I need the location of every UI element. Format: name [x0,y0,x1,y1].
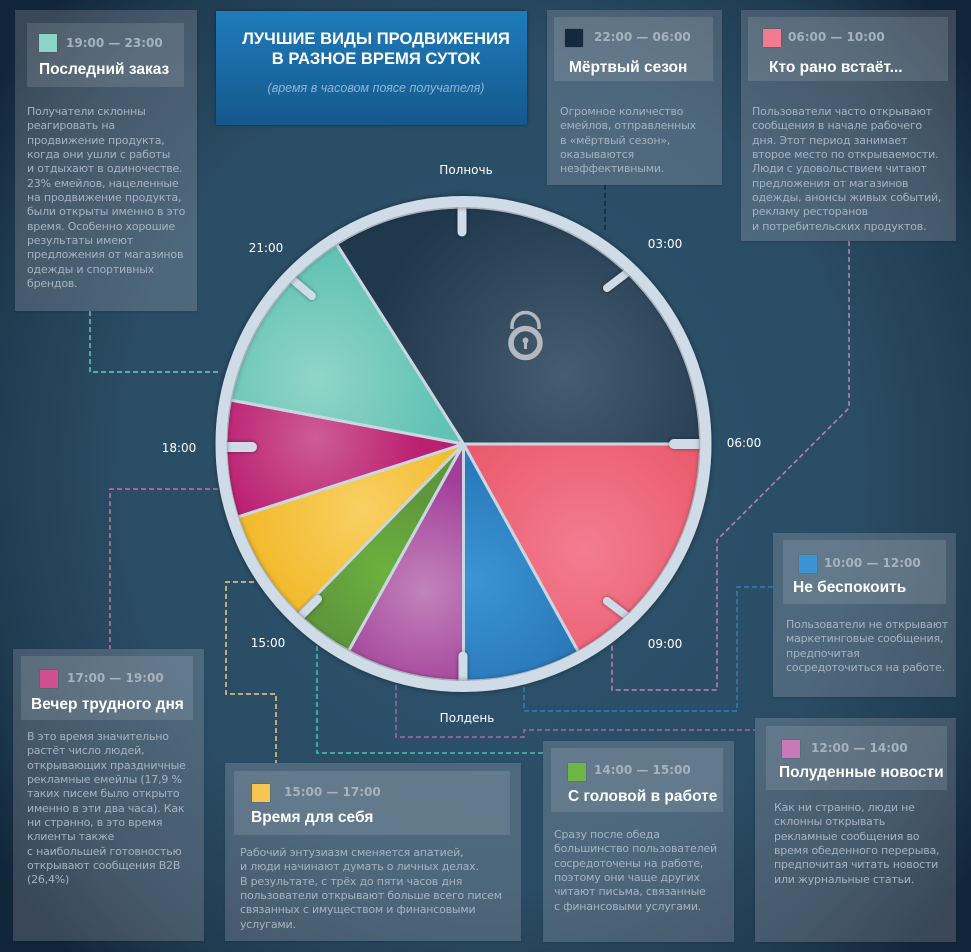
panel text: с наибольшей готовностью [27,845,182,858]
panel text [240,846,502,931]
time range: 14:00 — 15:00 [594,763,691,777]
panel text: одежды и спортивных [27,263,154,276]
panel header [783,540,946,604]
panel text: неэффективными. [560,162,664,175]
panel header [554,17,713,81]
panel text: услугами. [240,918,296,931]
clock label: 15:00: 15:00 [251,636,285,650]
heading [242,29,510,68]
panel title: Мёртвый сезон [569,59,687,76]
time range: 12:00 — 14:00 [811,741,908,755]
connector: after a hard day [110,489,218,649]
swatch [782,740,800,758]
panel: 22:00-06:00 dead season [547,10,722,185]
wedge: after a hard day 17-19 [226,400,464,517]
panel text: рекламу ресторанов [752,205,868,218]
panel text: были открыты именно в это [27,205,185,218]
panel text: предпочитая [786,647,860,660]
wedge: midday news 12-14 [348,444,464,681]
clock label: midnight: Полночь [439,163,493,177]
panel text: пользователи открывают больше всего писем [240,889,502,902]
panel: 15:00-17:00 time for yourself [225,763,521,941]
panel title: Последний заказ [39,61,169,78]
panel: 14:00-15:00 head in work [543,741,734,942]
swatch [565,29,583,47]
panel text: открывающих праздничные [27,759,186,772]
time range: 17:00 — 19:00 [67,671,164,685]
panel text: большинство пользователей [554,842,717,855]
swatch [799,555,817,573]
panel text: Огромное количество [560,105,683,118]
panel text: Сразу после обеда [554,828,660,841]
clock label: 09:00: 09:00 [648,637,682,651]
panel text: брендов. [27,277,77,290]
panel text: Пользователи часто открывают [752,105,932,118]
panel text: маркетинговые сообщения, [786,632,943,645]
connector: last order [90,311,219,372]
clock label: 06:00: 06:00 [727,436,761,450]
clock label: 21:00: 21:00 [249,241,283,255]
panel text [554,828,717,913]
panel text: таких писем было открыто [27,787,179,800]
time range: 19:00 — 23:00 [66,36,163,50]
clock label: 03:00: 03:00 [648,237,682,251]
panel text: открывают сообщения B2B [27,859,180,872]
panel: 10:00-12:00 do not disturb [773,533,956,697]
panel text [752,105,941,233]
panel text: склонны открывать [774,815,885,828]
panel header [551,748,723,812]
panel text: В это время значительно [27,730,169,743]
time range: 10:00 — 12:00 [824,556,921,570]
panel: 17:00-19:00 after a hard day [13,649,204,941]
wedge: head in work 14-15 [298,444,464,651]
connector: midday news [396,685,755,737]
panel text [774,801,939,886]
panel title: Кто рано встаёт... [769,59,903,76]
connector: head in work [317,645,543,753]
clock label: 18:00: 18:00 [162,441,196,455]
wedge: do not disturb 10-12 [464,444,578,681]
wedge: early risers 06-10 [464,444,701,652]
panel text: одежды, анонсы живых событий, [752,191,941,204]
panel title: Вечер трудного дня [31,696,184,713]
panel text: на продвижение продукта, [27,191,181,204]
panel text: Получатели склонны [27,105,146,118]
time range: 15:00 — 17:00 [284,785,381,799]
title panel [216,11,527,125]
panel text: Как ни странно, люди не [774,801,915,814]
time range: 06:00 — 10:00 [788,30,885,44]
wedge: time for yourself 15-17 [238,444,464,614]
heading: ЛУЧШИЕ ВИДЫ ПРОДВИЖЕНИЯ [242,29,510,48]
panel text: и отдыхают в одиночестве. [27,162,182,175]
panel text: связанных с имуществом и финансовыми [240,903,475,916]
panel text: предложения от магазинов [27,248,183,261]
connector: do not disturb [524,587,773,711]
panel text: (26,4%) [27,873,69,886]
panel title: С головой в работе [568,788,717,805]
panel text: продвижение продукта, [27,134,165,147]
panel text: сообщения в начале рабочего [752,119,922,132]
panel text: рекламные емейлы (17,9 % [27,773,182,786]
panel text: время. Особенно хорошие [27,220,175,233]
clock ring [221,202,706,686]
swatch [763,29,781,47]
subtitle: (время в часовом поясе получателя) [268,81,484,95]
panel text: Рабочий энтузиазм сменяется апатией, [240,846,463,859]
panel: 06:00-10:00 early risers [741,10,956,241]
swatch [40,670,58,688]
panel text: с финансовыми услугами. [554,900,701,913]
hour ticks [222,203,705,685]
panel text: сосредоточиться на работе. [786,661,945,674]
wedge: last order 19-22 [230,244,464,444]
panel text: второе место по открываемости. [752,148,938,161]
panel text [27,730,186,886]
panel text: рекламные сообщения во [774,830,919,843]
panel text: 23% емейлов, нацеленные [27,177,178,190]
panel header [27,23,184,87]
panel text: предпочитая читать новости [774,858,938,871]
panel text [786,618,948,674]
panel text: предложения от магазинов [752,177,908,190]
swatch [252,784,270,802]
time range: 22:00 — 06:00 [594,30,691,44]
icon: padlock [511,312,540,358]
panel text: результаты имеют [27,234,133,247]
panel text: и люди начинают думать о личных делах. [240,860,479,873]
panel text: читают письма, связанные [554,885,706,898]
wedge: dead season 22-06 [336,207,700,444]
panel text: клиенты также [27,830,114,843]
panel text: именно в эти два часа). Как [27,802,184,815]
pie wedges [226,207,701,681]
panel header [748,17,948,81]
panel text: ни странно, в это время [27,816,162,829]
swatch [39,34,57,52]
panel text: В результате, с трёх до пяти часов дня [240,875,462,888]
panel text: и потребительских продуктов. [752,220,926,233]
clock label: noon: Полдень [440,711,494,725]
heading: В РАЗНОЕ ВРЕМЯ СУТОК [272,49,480,68]
panel: 19:00-23:00 last order [15,10,197,311]
panel text: поэтому они чаще других [554,871,700,884]
panel text [560,105,696,175]
panel text: дня. Этот период занимает [752,134,907,147]
panel text: реагировать на [27,119,115,132]
connector: dead season [604,185,606,233]
connector: early risers [612,241,849,690]
panel: 12:00-14:00 midday news [755,718,956,942]
panel header [21,656,193,720]
swatch [568,763,586,781]
panel title: Не беспокоить [793,579,906,596]
panel header [234,771,510,835]
panel text: когда они ушли с работы [27,148,170,161]
panel title: Время для себя [251,809,373,826]
panel text: или журнальные статьи. [774,873,914,886]
panel text: емейлов, отправленных [560,119,696,132]
panel text: Пользователи не открывают [786,618,948,631]
panel text: Люди с удовольствием читают [752,162,927,175]
panel header [766,726,947,790]
panel text [27,105,185,290]
connector: time for yourself [226,582,276,763]
panel text: оказываются [560,148,634,161]
clock pie chart [213,194,714,694]
panel text: в «мёртвый сезон», [560,134,670,147]
panel title: Полуденные новости [779,764,944,781]
panel text: время обеденного перерыва, [774,844,939,857]
panel text: сосредоточены на работе, [554,857,703,870]
panel text: растёт число людей, [27,744,144,757]
